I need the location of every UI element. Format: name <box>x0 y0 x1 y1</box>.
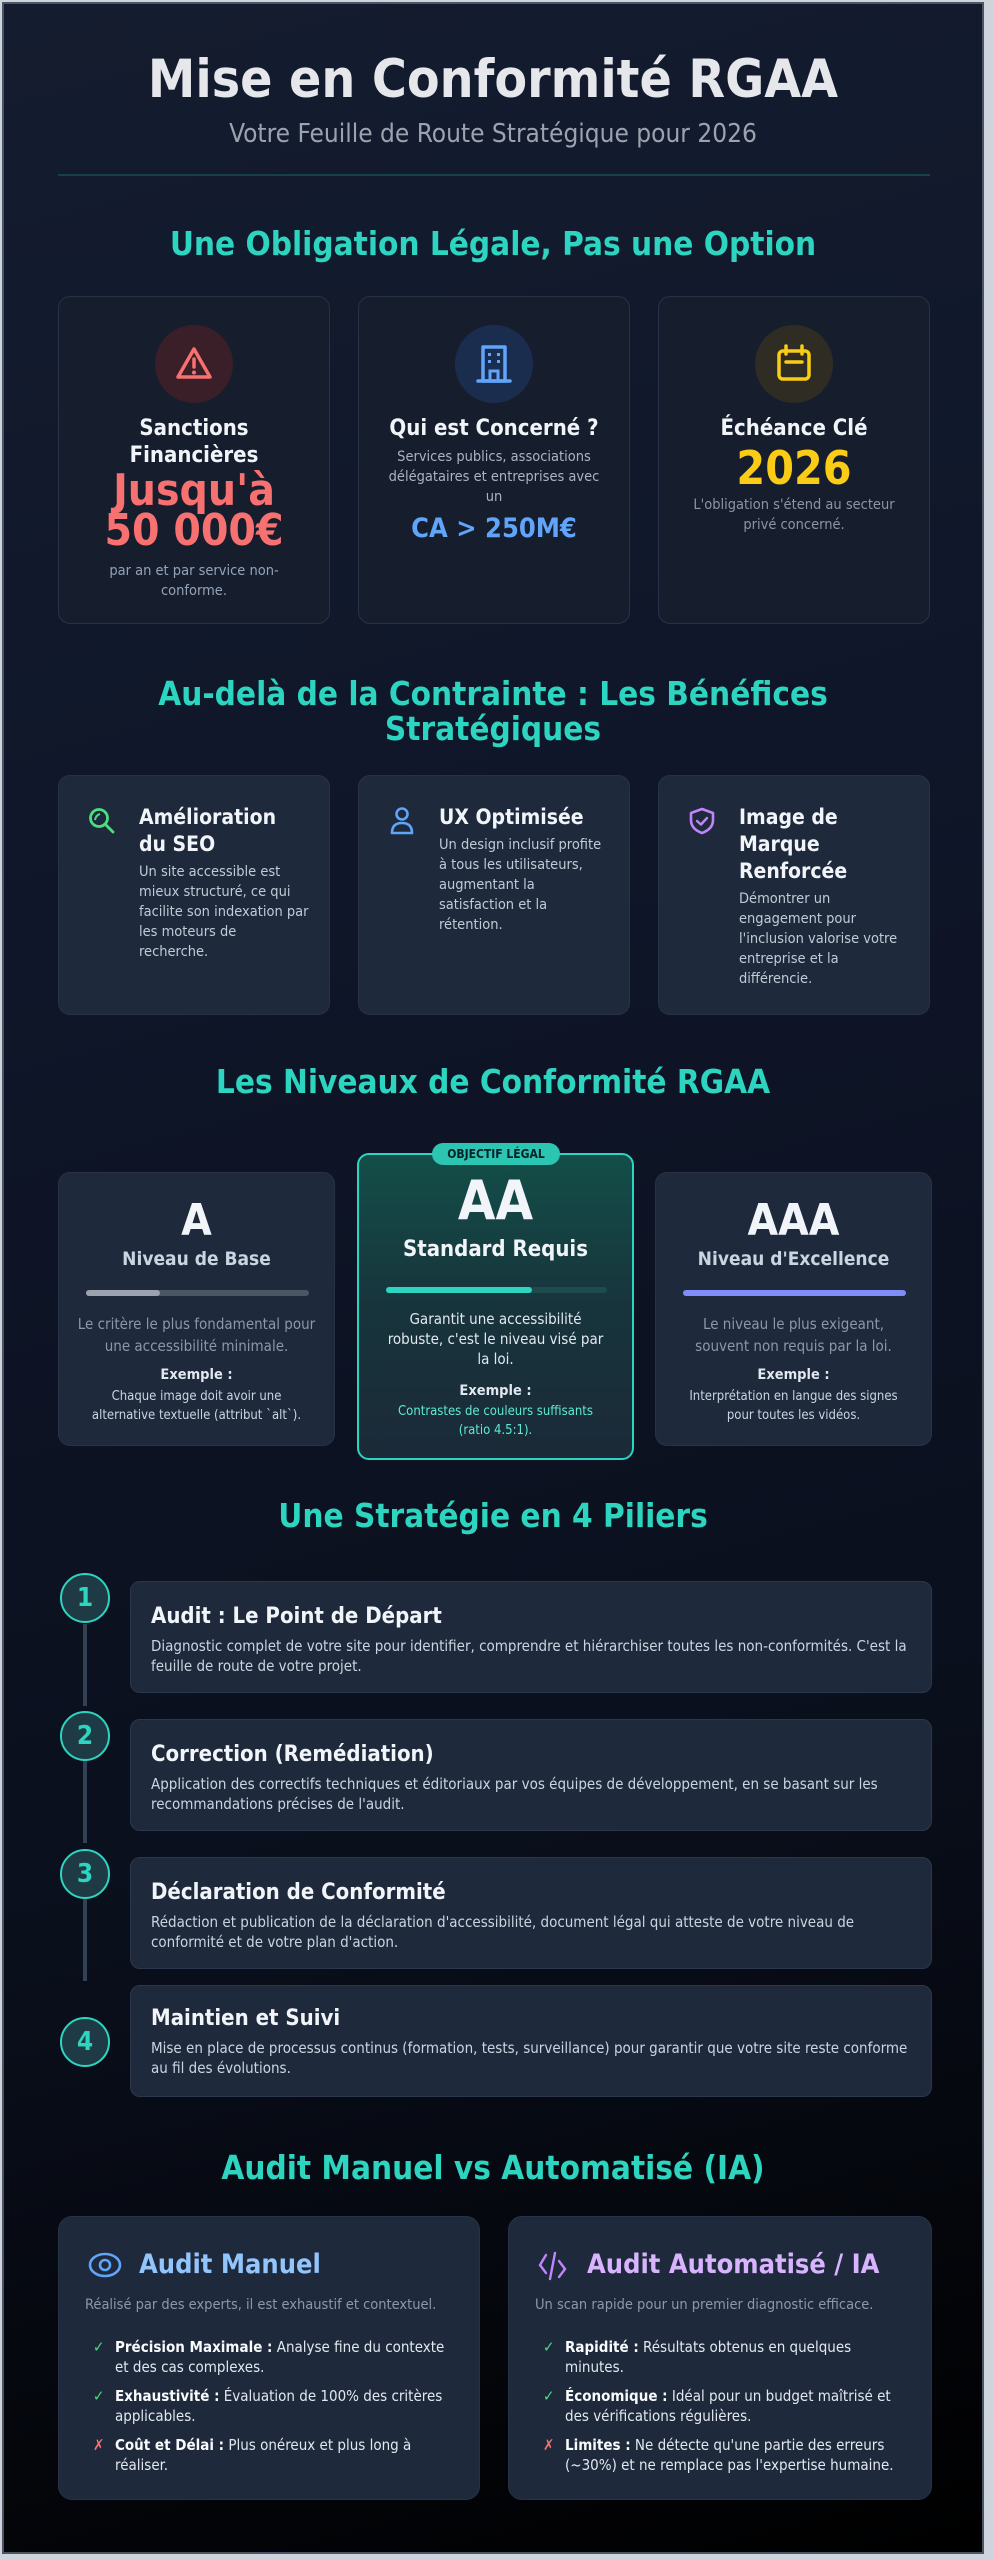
step 1 number <box>60 1573 110 1623</box>
text: L'obligation s'étend au secteur privé concerné. <box>693 497 895 533</box>
icon: eye <box>88 2252 122 2278</box>
step 3 card: Rédaction et publication de la déclaration d'accessibilité, document légal qui atteste de votre niveau de conformité et de votre plan d'action. <box>151 1913 854 1951</box>
panel: deadline <box>658 296 930 624</box>
panel: level AAA: Interprétation en langue des signes pour toutes les vidéos. <box>689 1389 898 1423</box>
icon: code <box>538 2252 566 2280</box>
list: automated <box>543 2338 894 2474</box>
panel: level AAA: AAA <box>748 1195 839 1246</box>
list: automated: Économique : Idéal pour un budget maîtrisé et des vérifications régulières. <box>565 2387 891 2425</box>
stat: 50 000€ <box>104 465 284 556</box>
title: Mise en Conformité RGAA <box>148 49 838 110</box>
panel: level A: A <box>181 1195 212 1246</box>
text: sanctions title <box>130 416 258 468</box>
heading: audit comparison: Audit Manuel vs Automatisé (IA) <box>221 2148 765 2187</box>
text: brand: Image de Marque Renforcée <box>739 805 847 883</box>
heading: benefits <box>158 674 828 748</box>
step 2 card: Application des correctifs techniques et éditoriaux par vos équipes de développement, en se basant sur les recommandations précises de l'audit. <box>151 1775 878 1813</box>
heading: levels: Les Niveaux de Conformité RGAA <box>216 1062 770 1101</box>
panel: level AA <box>357 1153 634 1460</box>
list: automated: ✓ <box>543 2387 554 2405</box>
panel: level AAA: Le niveau le plus exigeant, souvent non requis par la loi. <box>695 1315 892 1355</box>
step 3 number <box>60 1849 110 1899</box>
panel: automated audit <box>508 2216 932 2500</box>
stat: 2026: 2026 <box>736 441 852 495</box>
panel: level A <box>58 1172 335 1446</box>
heading: benefits: Au-delà de la Contrainte : Les Bénéfices <box>158 674 828 713</box>
list: manual <box>93 2338 444 2474</box>
text: deadline title: Échéance Clé <box>720 416 868 441</box>
panel: level AA: Garantit une accessibilité robuste, c'est le niveau visé par la loi. <box>388 1310 603 1368</box>
heading: benefits: Stratégiques <box>385 709 601 748</box>
text: par an et par service non-conforme. <box>109 563 279 599</box>
step 2 card <box>130 1719 932 1831</box>
list: manual: ✓ <box>93 2338 104 2356</box>
panel: level AA: AA <box>458 1169 533 1232</box>
text: UX: Un design inclusif profite à tous les utilisateurs, augmentant la satisfaction et la rétention. <box>439 837 601 933</box>
step 1 card <box>130 1581 932 1693</box>
panel: level AAA: Niveau d'Excellence <box>698 1248 889 1270</box>
panel: level AA: Exemple : <box>459 1383 532 1399</box>
panel: level A: Le critère le plus fondamental pour une accessibilité minimale. <box>78 1315 315 1355</box>
list: manual: Exhaustivité : Évaluation de 100% des critères applicables. <box>115 2387 442 2425</box>
step 4 number <box>60 2017 110 2067</box>
list: manual: ✗ <box>93 2436 104 2454</box>
stat: 50 000€: 50 000€ <box>104 505 284 556</box>
text: brand: Démontrer un engagement pour l'inclusion valorise votre entreprise et la différencie. <box>739 891 897 987</box>
text: brand <box>739 805 897 987</box>
text: Services publics, associations délégataires et entreprises avec un <box>389 449 599 505</box>
step 1 card: Audit : Le Point de Départ <box>151 1604 442 1629</box>
progress bar AA <box>386 1287 607 1293</box>
step 2 number <box>60 1711 110 1761</box>
icon: user <box>390 807 414 834</box>
step 4 card: Maintien et Suivi <box>151 2006 340 2031</box>
list: automated: ✗ <box>543 2436 554 2454</box>
panel: manual audit <box>58 2216 480 2500</box>
text: SEO: Un site accessible est mieux structuré, ce qui facilite son indexation par les moteurs de recherche. <box>139 864 309 960</box>
panel: level AAA <box>655 1172 932 1446</box>
progress bar AAA <box>683 1290 906 1296</box>
panel: level AA: Standard Requis <box>403 1237 588 1262</box>
subtitle: Votre Feuille de Route Stratégique pour 2026 <box>229 119 757 149</box>
panel: manual audit: Réalisé par des experts, il est exhaustif et contextuel. <box>85 2297 436 2313</box>
text: sanctions title: Financières <box>130 443 258 468</box>
panel: level AA: Contrastes de couleurs suffisants (ratio 4.5:1). <box>398 1404 593 1438</box>
heading: obligation: Une Obligation Légale, Pas une Option <box>170 224 816 263</box>
step 4 number: 4 <box>77 2027 93 2057</box>
text: sanctions title: Sanctions <box>139 416 249 441</box>
badge: objectif légal: OBJECTIF LÉGAL <box>447 1147 545 1161</box>
step 3 card <box>130 1857 932 1969</box>
panel: automated audit: Un scan rapide pour un premier diagnostic efficace. <box>535 2297 873 2313</box>
list: manual: ✓ <box>93 2387 104 2405</box>
step 1 number: 1 <box>77 1583 93 1613</box>
progress bar A <box>86 1290 309 1296</box>
list: automated: Limites : Ne détecte qu'une partie des erreurs (~30%) et ne remplace pas l'expertise humaine. <box>565 2436 894 2474</box>
icon: calendar <box>755 325 833 403</box>
text: SEO: Amélioration du SEO <box>139 805 276 856</box>
step 1 card: Diagnostic complet de votre site pour identifier, comprendre et hiérarchiser toutes les non-conformités. C'est la feuille de route de votre projet. <box>151 1637 907 1675</box>
panel: brand <box>658 775 930 1015</box>
icon: building <box>455 325 533 403</box>
icon: shield <box>690 808 714 834</box>
stat: CA: CA > 250M€ <box>411 513 577 544</box>
badge: objectif légal <box>432 1143 560 1165</box>
panel: level AAA: Exemple : <box>757 1367 830 1383</box>
panel: concerned <box>358 296 630 624</box>
panel: level A: Exemple : <box>160 1367 233 1383</box>
panel: level A: Niveau de Base <box>122 1248 271 1270</box>
text: UX: UX Optimisée <box>439 805 584 829</box>
list: automated: ✓ <box>543 2338 554 2356</box>
panel: sanctions <box>58 296 330 624</box>
text: automated title: Audit Automatisé / IA <box>587 2249 879 2280</box>
list: manual: Précision Maximale : Analyse fine du contexte et des cas complexes. <box>115 2338 444 2376</box>
step 2 card: Correction (Remédiation) <box>151 1742 434 1767</box>
icon: warning <box>155 325 233 403</box>
step 4 card: Mise en place de processus continus (formation, tests, surveillance) pour garantir que votre site reste conforme au fil des évolutions. <box>151 2039 907 2077</box>
heading: pillars: Une Stratégie en 4 Piliers <box>278 1496 708 1535</box>
stat: 50 000€: Jusqu'à <box>113 465 275 516</box>
step 4 card <box>130 1985 932 2097</box>
text: concerned title: Qui est Concerné ? <box>389 416 599 441</box>
list: manual: Coût et Délai : Plus onéreux et plus long à réaliser. <box>115 2436 411 2474</box>
list: automated: Rapidité : Résultats obtenus en quelques minutes. <box>565 2338 851 2376</box>
text: SEO <box>139 805 309 960</box>
icon: search <box>89 808 114 834</box>
panel: level A: Chaque image doit avoir une alternative textuelle (attribut `alt`). <box>92 1389 301 1423</box>
step 3 number: 3 <box>77 1859 93 1889</box>
panel: SEO <box>58 775 330 1015</box>
text: manual title: Audit Manuel <box>139 2249 321 2280</box>
step 3 card: Déclaration de Conformité <box>151 1880 446 1905</box>
step 2 number: 2 <box>77 1721 93 1751</box>
panel: UX <box>358 775 630 1015</box>
